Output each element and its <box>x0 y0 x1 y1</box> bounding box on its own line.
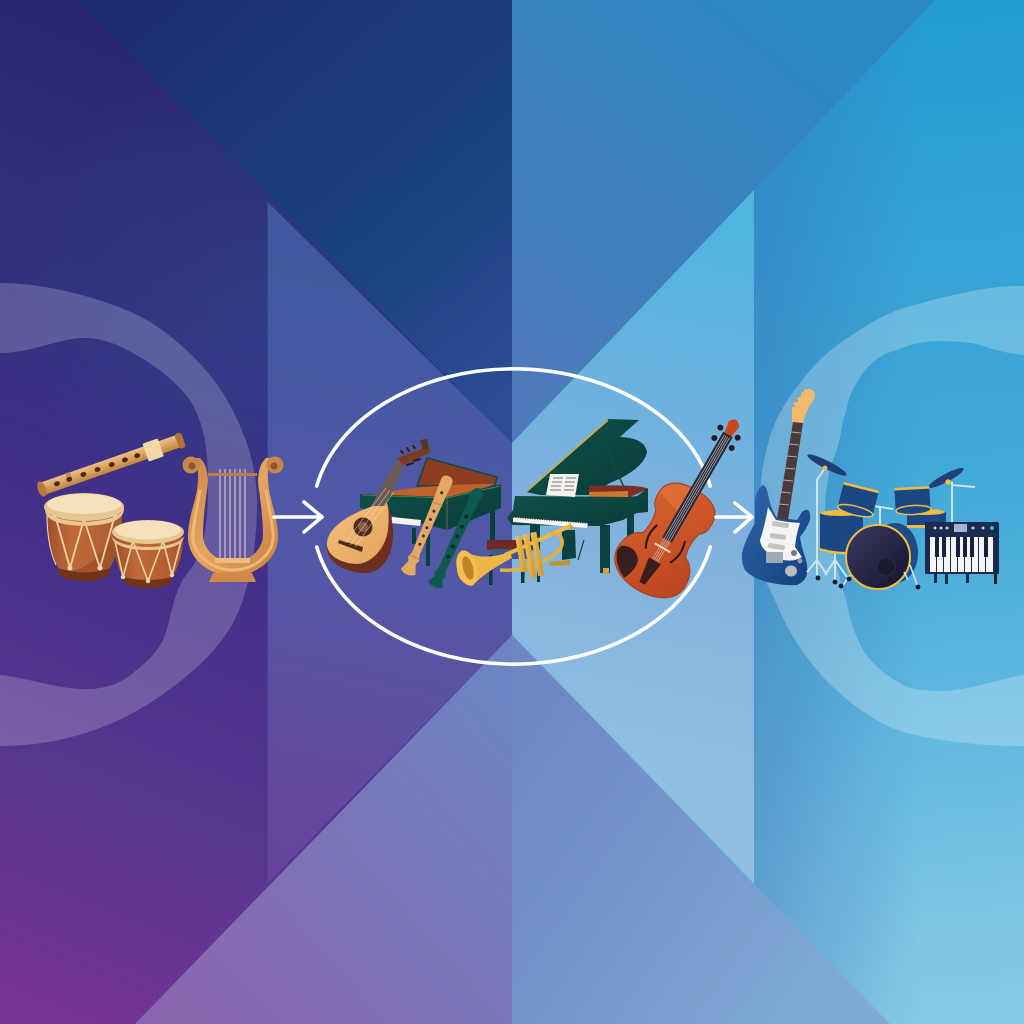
group: ancient instruments <box>35 430 283 588</box>
decorative band right <box>760 286 1024 746</box>
icon: drum kit <box>806 451 975 589</box>
icon: large drum <box>44 493 124 581</box>
icon: electric guitar <box>742 389 815 585</box>
icon: keyboard <box>925 522 999 584</box>
arrow: ancient to classical <box>274 502 322 532</box>
icon: violin <box>604 401 770 610</box>
arrow: classical to modern <box>716 503 752 532</box>
icon: wooden flute <box>35 430 187 499</box>
icon: small drum <box>111 520 185 588</box>
icon: lyre <box>182 456 284 582</box>
group: modern instruments <box>742 389 999 589</box>
icon: harpsichord <box>360 458 501 566</box>
icon: trumpet on bench <box>453 522 574 588</box>
group: classical instruments <box>327 401 770 610</box>
icon: grand piano <box>507 419 648 574</box>
icon: lute <box>327 439 431 573</box>
icon: green recorder <box>427 485 487 590</box>
oval frame around classical instruments <box>317 369 710 664</box>
icon: beige recorder <box>400 473 456 578</box>
decorative band left <box>0 283 257 746</box>
